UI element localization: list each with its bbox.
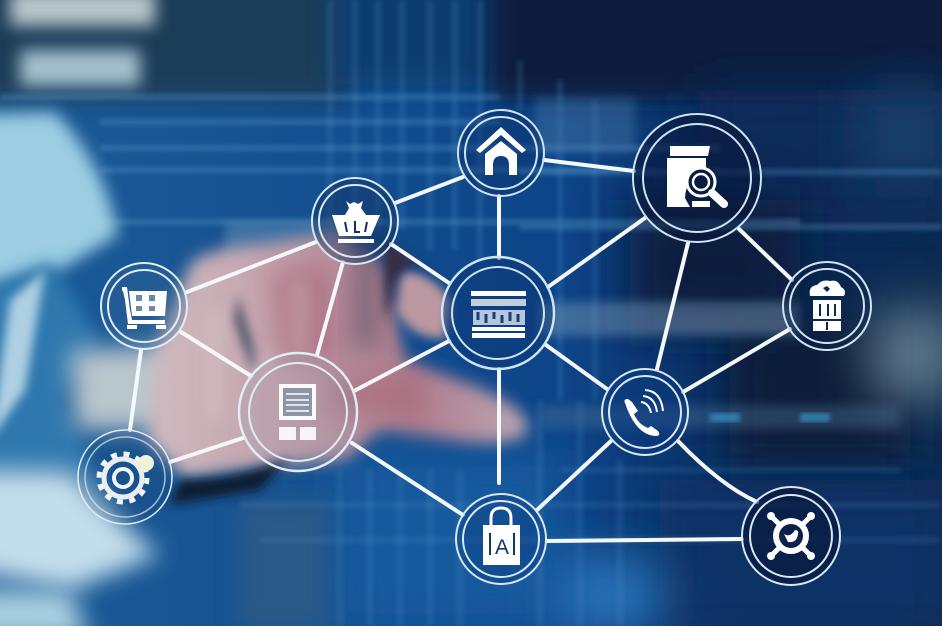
icon: storefront panel <box>471 291 526 338</box>
node: gear <box>78 430 172 524</box>
node: home <box>458 110 544 196</box>
icon: cloud over cabinet <box>810 280 845 296</box>
network connection lines <box>130 160 792 541</box>
node: phone <box>602 369 688 455</box>
hand <box>148 232 528 505</box>
icon: file with magnifier <box>667 146 724 207</box>
node: twitter bird in ring <box>742 487 840 585</box>
node: central panel <box>442 257 554 369</box>
node: crown <box>312 178 398 264</box>
node: cloud and devices <box>783 262 871 350</box>
icon: form document <box>279 384 316 440</box>
node: document <box>239 353 357 471</box>
icon: gear <box>99 454 154 502</box>
node: shopping bag <box>456 494 546 584</box>
icon: shopping cart <box>122 287 167 329</box>
icon: bag: A <box>495 536 509 559</box>
node: cart <box>101 263 187 349</box>
sleeve <box>0 0 190 626</box>
node: document search <box>633 114 761 242</box>
icon: house <box>476 127 526 175</box>
icon: crown <box>332 201 380 243</box>
icon: phone handset with signal <box>624 390 663 436</box>
icon: ring with four arms <box>767 512 815 560</box>
